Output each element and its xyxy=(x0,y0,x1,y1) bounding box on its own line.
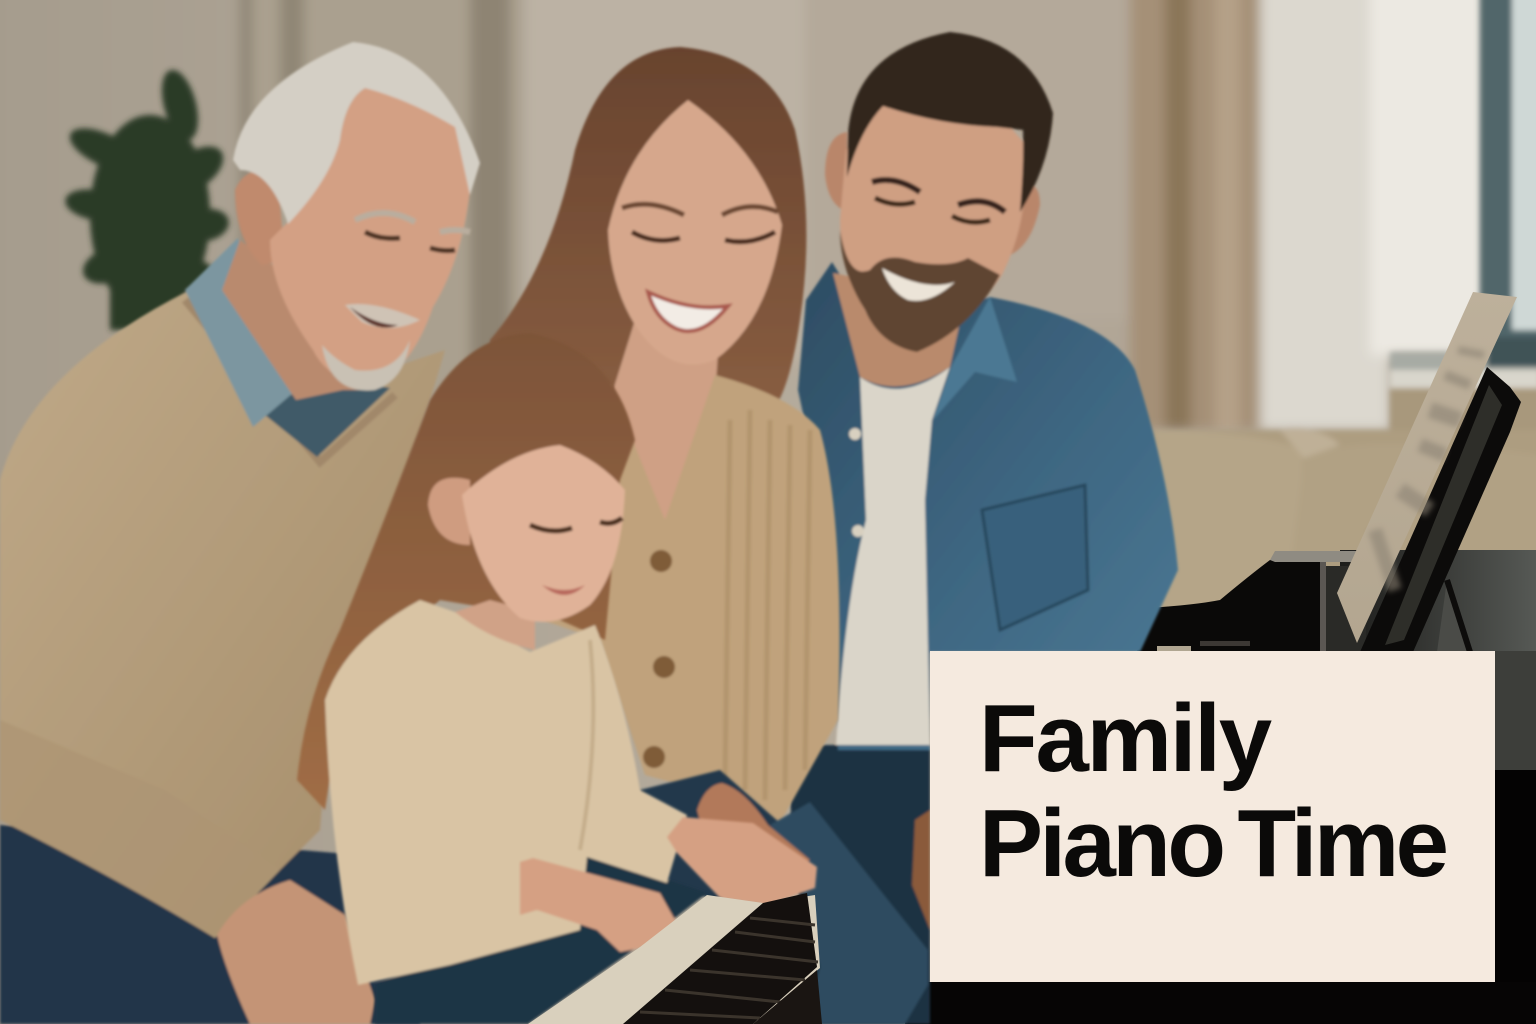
man: hand on knee xyxy=(912,810,930,930)
woman: cardigan xyxy=(370,360,840,823)
grandfather: ear xyxy=(235,169,285,265)
man: denim shirt xyxy=(798,262,1178,750)
girl: eyes xyxy=(530,518,622,531)
grandfather: moustache and smile xyxy=(345,304,420,328)
woman: smile xyxy=(648,292,728,331)
man: ears xyxy=(825,132,1040,255)
man: hair xyxy=(847,32,1053,212)
grandfather: inner shirt xyxy=(265,380,390,457)
grandfather in beige sweater xyxy=(0,42,480,1024)
grandfather: neck xyxy=(222,240,375,400)
girl: left hand xyxy=(520,858,679,952)
girl: face xyxy=(462,445,625,622)
grandfather: hand xyxy=(217,880,375,1024)
girl: hair xyxy=(297,333,635,810)
piano keyboard xyxy=(528,893,822,1024)
title: Family Piano Time: Piano Time xyxy=(979,790,1445,897)
sheet music and stand xyxy=(1337,292,1521,652)
grandfather: hair xyxy=(233,42,480,224)
window frame and sill xyxy=(1390,0,1536,458)
woman: dark jeans at the lap xyxy=(640,770,780,900)
woman in cardigan xyxy=(370,47,840,823)
woman: eyes xyxy=(632,232,775,242)
man: beard xyxy=(840,230,1000,352)
houseplant xyxy=(63,66,232,330)
girl: jeans xyxy=(375,850,707,1024)
man: smile xyxy=(882,268,955,301)
man: face xyxy=(840,100,1030,352)
man: t-shirt xyxy=(836,367,950,745)
girl: ear xyxy=(428,478,470,545)
girl: right hand xyxy=(667,817,817,905)
title card xyxy=(930,651,1495,982)
girl: neck xyxy=(455,600,535,650)
man in denim shirt xyxy=(790,32,1178,1024)
girl: smile xyxy=(542,585,585,595)
woman: face xyxy=(608,100,782,365)
man: eyes xyxy=(875,198,990,222)
girl playing piano xyxy=(297,333,817,1024)
grandfather: goatee xyxy=(322,340,410,390)
grandfather: head xyxy=(270,88,470,390)
title: Family Piano Time: Family xyxy=(979,685,1270,792)
woman's lap and jeans xyxy=(640,770,928,1024)
sofa xyxy=(1150,429,1536,620)
woman: thigh xyxy=(770,802,928,1024)
grandfather: shirt collar xyxy=(185,238,293,427)
man: jeans xyxy=(790,745,930,1024)
woman: hair xyxy=(490,47,806,430)
grandfather: eyes xyxy=(365,232,455,251)
title: Family Piano Time xyxy=(979,685,1446,897)
woman: hand xyxy=(697,783,810,880)
man: shirt pocket xyxy=(982,485,1088,630)
woman: neck xyxy=(610,320,720,525)
girl: sweater xyxy=(325,600,687,985)
man: shirt collar xyxy=(933,297,1017,420)
man: neck xyxy=(833,273,965,386)
woman: cardigan buttons xyxy=(643,550,675,768)
grandfather: jeans xyxy=(0,825,420,1024)
man: shirt buttons xyxy=(849,428,1051,537)
grandfather: sweater xyxy=(0,290,445,938)
piano body and lid xyxy=(905,550,1536,1024)
